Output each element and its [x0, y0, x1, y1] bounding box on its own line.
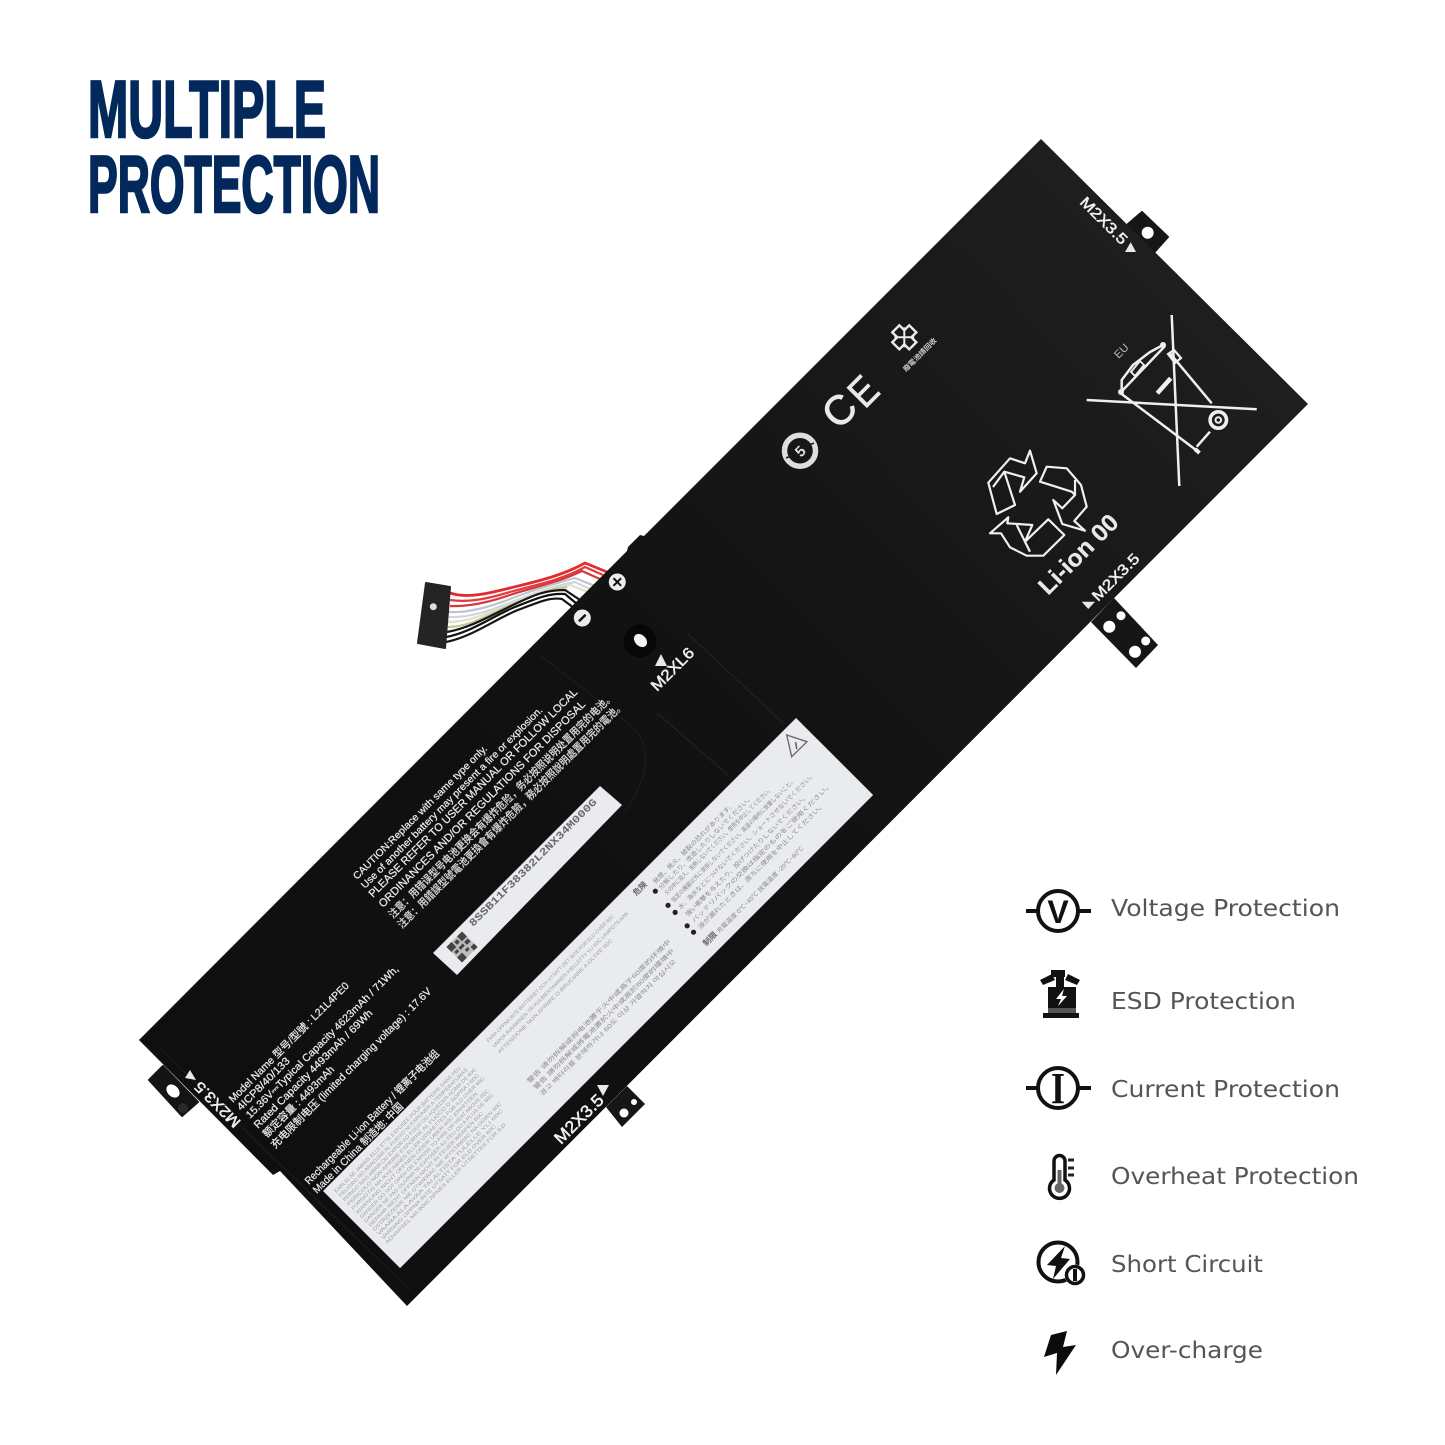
EU mark: EU	[1112, 342, 1131, 361]
icon: ESD	[1040, 970, 1080, 1018]
Japanese warning text: 水、海水などにつけないでください。ショートさせないでください。	[677, 771, 817, 911]
origin text block: Made in China 制造地: 中国	[310, 1100, 406, 1196]
mounting tab: top right	[1128, 212, 1168, 257]
minus terminal	[574, 610, 591, 626]
multilingual warning text, middle column: 警告 请勿拆解或将电池置于火中或高于60度的环境中	[525, 938, 672, 1085]
multilingual warning text, left column: DANGER NE PAS OUVRIR NI EXPOSER AU FEU OU A PLUS DE 60C	[363, 1092, 495, 1224]
multilingual warning text, left column: VARNING OPPNA INTE UTSATT FOR ELD OVER 60C	[380, 1123, 498, 1241]
spec text block: Model Name 型号/型號 : L21L4PE0	[226, 979, 352, 1105]
item: over-charge: Over-charge	[1111, 1338, 1263, 1364]
multilingual warning text, middle column: 경고 배터리를 분해하거나 60도 이상 가열하지 마십시오	[538, 957, 678, 1098]
multilingual warning text, left column: PELIGRO NO ARROJAR AL FUEGO NI EXPONER A TEMPERATURAS	[338, 1067, 470, 1199]
multilingual warning text, left column: GEFAHR NICHT OFFNEN NICHT IN FEUER WERFEN 60C	[368, 1111, 485, 1228]
multilingual warning text, middle column: FARA OPPNA INTE BATTERIET OCH UTSATT DET INTE FOR ELD OVER 60C	[486, 914, 616, 1044]
multilingual warning text, middle column	[486, 898, 685, 1098]
icon: CE mark: C	[813, 384, 866, 437]
caution text block: CAUTION:Replace with same type only.	[351, 744, 490, 882]
item: ESD protection	[1040, 970, 1296, 1018]
icon: short circuit	[1038, 1242, 1086, 1286]
Japanese warning text	[631, 737, 851, 958]
origin text block: Rechargeable Li-ion Battery / 锂离子电池组	[302, 1047, 442, 1187]
Japanese warning text: 発煙、発火、破裂の恐れがあります。	[651, 801, 736, 886]
screw label top right	[1076, 194, 1136, 252]
warning triangle	[787, 735, 807, 757]
mounting tab: left	[149, 1066, 198, 1116]
icon: voltage: V	[1047, 894, 1069, 930]
multilingual warning text, left column: PERIGO NAO ABRIR OU EXPOR AO FOGO OU AQUECER ACIMA DE 60C	[342, 1067, 478, 1203]
barcode label	[433, 786, 622, 975]
item: ESD protection: ESD Protection	[1111, 989, 1296, 1015]
Li-ion 00 marking: Li-ion 00	[1033, 509, 1124, 600]
protection list	[1026, 891, 1359, 1375]
icon: voltage	[1026, 891, 1091, 931]
screw hole	[624, 624, 656, 658]
multilingual warning text, middle column: 警告 請勿拆解或將電池置於火中或高於60度的環境中	[532, 947, 676, 1091]
multilingual warning text, left column: VAARA ALA AVAA TAI ALTISTA TULELLE YLI 60C	[376, 1108, 505, 1237]
warning label	[323, 718, 873, 1268]
title	[88, 65, 380, 230]
multilingual warning text, left column: PERICOLO NON APRIRE ESPORRE AL FUOCO O SOPRA I 60C	[346, 1073, 481, 1207]
spec text block: 15.36V⎓Typical Capacity 4623mAh / 71Wh,	[244, 963, 401, 1121]
title: MULTIPLE	[88, 65, 326, 155]
item: overheat protection: Overheat Protection	[1111, 1164, 1359, 1190]
caution text block	[351, 687, 627, 931]
icon: cycle 5: 5	[792, 443, 810, 461]
multilingual warning text, middle column: VAROA AVAAMINEN TAI KUUMENTAMINEN KIELLETTY YLI 60C LAMPOTILAAN	[491, 911, 630, 1050]
item: overheat protection	[1050, 1156, 1359, 1198]
battery outline	[139, 139, 1308, 1306]
battery body	[139, 139, 1308, 1306]
spec text block	[226, 963, 434, 1151]
item: over-charge	[1044, 1331, 1263, 1375]
multilingual warning text, left column	[333, 1058, 521, 1245]
spec text block: 4ICP8/40/133	[235, 1055, 293, 1113]
icon: recycling mark for batteries: 廢電池請回收	[901, 336, 939, 373]
screw label M2XL6: M2XL6	[648, 645, 698, 695]
caution text block: Use of another battery may present a fire or explosion.	[359, 705, 545, 891]
spec text block: Rated Capacity 4493mAh / 69Wh	[252, 1007, 375, 1131]
multilingual warning text, middle column: ATTENZIONE NON APRIRE O BRUCIARE A OLTRE 60C	[497, 938, 615, 1055]
screw label left: M2X3.5	[191, 1078, 244, 1131]
caution text block: 注意：用錯誤型號電池更換會有爆炸危險，務必按照說明處置用完的電池。	[394, 698, 627, 931]
warning bullets	[650, 888, 699, 936]
mounting tab: lower right	[1091, 598, 1158, 668]
cable and connector	[418, 563, 607, 648]
multilingual warning text, left column: OSTRZEZENIE NIE OTWIERAC NIE WYSTAWIAC NA OGIEN 60C	[372, 1101, 504, 1233]
caution text block: 注意：用错误型号电池更换会有爆炸危险，务必按照说明处置用完的电池。	[385, 690, 616, 921]
icon: thermometer	[1050, 1156, 1074, 1198]
item: voltage protection	[1026, 891, 1340, 931]
Japanese warning text: 強い衝撃を与えたり、投げつけたりしないでください。	[684, 792, 809, 918]
icon: lightning bolt	[1044, 1331, 1076, 1375]
Japanese warning text: 火の中に投入、加熱しないでください。使用を中止してください。	[662, 785, 774, 897]
multilingual warning text, left column: DANGER DO NOT OPEN OR EXPOSE TO FIRE OR HEAT ABOVE 60C	[359, 1088, 491, 1220]
barcode label: 8SSB11F38382L2NX34M000G	[467, 797, 600, 930]
Japanese warning text: 充電温度 0℃~45℃ 放電温度 -20℃~60℃	[715, 845, 805, 935]
icon: current: I	[1051, 1064, 1065, 1113]
Japanese warning text: 指定の機器以外に使用しないでください。高温の場所に放置しないこと。	[669, 777, 797, 904]
icon: crossed-out wheelie bin	[1087, 315, 1257, 486]
icon: CE mark	[813, 367, 888, 437]
mounting tab: lower middle	[606, 1086, 645, 1127]
Japanese warning text: 危険	[631, 879, 649, 898]
panel seams	[160, 633, 783, 1290]
Japanese warning text: バッテリパックの交換は指定のものをご使用ください。	[690, 781, 834, 924]
screw label top right: M2X3.5	[1076, 194, 1131, 248]
screw label lower right	[1082, 550, 1143, 609]
item: current protection: Current Protection	[1111, 1077, 1340, 1103]
screw label lower middle: M2X3.5	[550, 1091, 608, 1148]
item: short circuit	[1038, 1242, 1263, 1286]
multilingual warning text, left column: EARLIG NE JAMAIS ELLE ETTE EXPOSÉE POUR BATTERIE DANS FEU	[333, 1065, 463, 1195]
QR code	[446, 931, 478, 963]
caution text block: ORDINANCES AND/OR REGULATIONS FOR DISPOSAL	[377, 699, 588, 910]
item: short circuit: Short Circuit	[1111, 1252, 1263, 1278]
multilingual warning text, left column: ADVARSEL MA IKKE APNES ELLER UTSETTES FOR ILD	[385, 1122, 508, 1245]
plus terminal	[609, 574, 626, 590]
item: voltage protection: Voltage Protection	[1111, 896, 1340, 922]
multilingual warning text, left column: FORSIGTIG MA IKKE ABNES ELLER UDSAETTES FOR ILD OVER 60C	[351, 1075, 487, 1212]
Japanese warning text: 液が漏れたときは、直ちに使用を中止してください。	[696, 801, 826, 931]
icon: recycling mark for batteries	[887, 320, 939, 373]
icon: cycle 5	[784, 435, 816, 466]
Japanese warning text: 分解したり、改造したりしないでください。	[657, 794, 754, 891]
screw label lower right: M2X3.5	[1089, 550, 1143, 605]
spec text block: 额定容量 : 4493mAh	[260, 1063, 337, 1140]
screw label left	[185, 1070, 244, 1131]
caution text block: PLEASE REFER TO USER MANUAL OR FOLLOW LOCAL	[367, 687, 580, 900]
Japanese warning text: 制限	[701, 929, 719, 948]
spec text block: 充电限制电压 (limited charging voltage) : 17.6V	[268, 985, 434, 1151]
icon: current	[1026, 1064, 1091, 1113]
title: PROTECTION	[88, 140, 380, 230]
icon: recycling arrows	[988, 451, 1087, 556]
multilingual warning text, left column: WARNUNG NICHT OFFNEN ODER UBER 60C ERHITZEN	[355, 1091, 480, 1216]
item: current protection	[1026, 1064, 1340, 1113]
icon: CE mark: E	[839, 367, 888, 416]
